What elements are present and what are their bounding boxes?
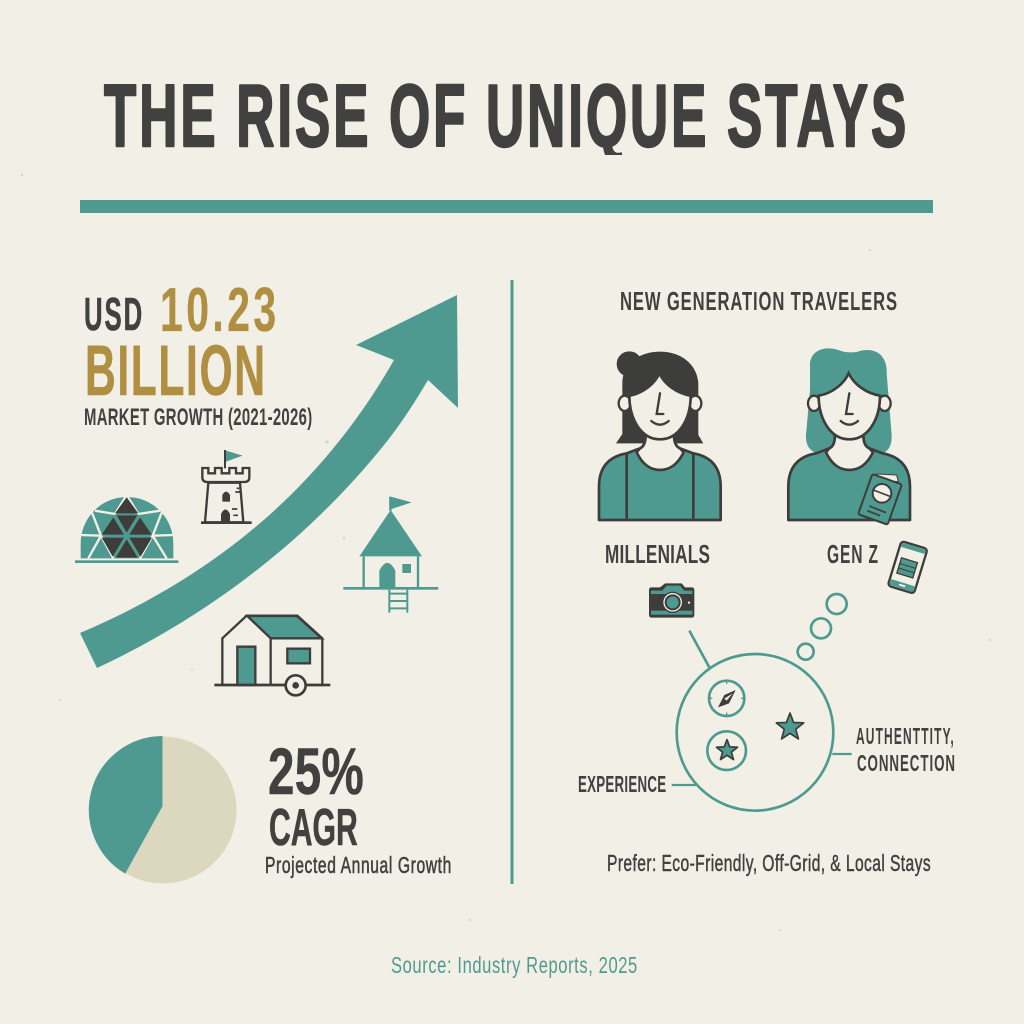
CAGR stat: CAGR [269, 800, 358, 857]
icon: compass [709, 681, 744, 716]
icon: passport [858, 474, 902, 525]
source: Source: Industry Reports, 2025 [391, 953, 637, 979]
CAGR stat: Projected Annual Growth [265, 853, 451, 879]
centre divider [510, 280, 514, 884]
icon group: unique stays [75, 450, 438, 695]
label: millennials: MILLENIALS [605, 539, 710, 569]
connector: camera to circle [689, 631, 709, 667]
label: authenticity, connection: CONNECTION [857, 750, 955, 776]
market size stat: USD [84, 288, 142, 340]
preference note: Prefer: Eco-Friendly, Off-Grid, & Local Stays [607, 851, 931, 877]
icon: camera [649, 583, 694, 618]
icon: castle tower [201, 450, 252, 524]
connector: experience [672, 781, 696, 788]
growth arrow [80, 295, 458, 668]
figure: gen z [788, 348, 910, 520]
icon: tiny house on wheels [214, 616, 330, 695]
connector: authenticity [832, 750, 852, 757]
market size stat: BILLION [85, 332, 265, 411]
pie chart: CAGR [89, 736, 236, 884]
label: experience: EXPERIENCE [578, 771, 666, 797]
icon: smartphone [888, 541, 928, 594]
figure: millennial [599, 351, 721, 520]
label: authenticity, connection [856, 723, 955, 776]
main circle [677, 654, 833, 811]
title underline [80, 200, 933, 213]
icon: geodesic dome [75, 495, 178, 563]
market size stat: 10.23 [160, 276, 276, 345]
icon: star badge [707, 731, 746, 770]
market size stat: MARKET GROWTH (2021-2026) [84, 405, 312, 431]
label: authenticity, connection: AUTHENTTITY, [856, 723, 954, 749]
icon: star [776, 713, 804, 739]
market size stat [84, 276, 312, 431]
heading: new generation travelers: NEW GENERATION TRAVELERS [620, 286, 897, 316]
CAGR stat: 25% [268, 735, 364, 809]
values diagram [649, 583, 852, 811]
thought bubbles [798, 594, 847, 660]
icon: treehouse [343, 497, 438, 613]
title: THE RISE OF UNIQUE STAYS [104, 67, 906, 165]
CAGR stat [265, 735, 451, 879]
label: gen z: GEN Z [827, 540, 878, 569]
personas [599, 348, 928, 594]
